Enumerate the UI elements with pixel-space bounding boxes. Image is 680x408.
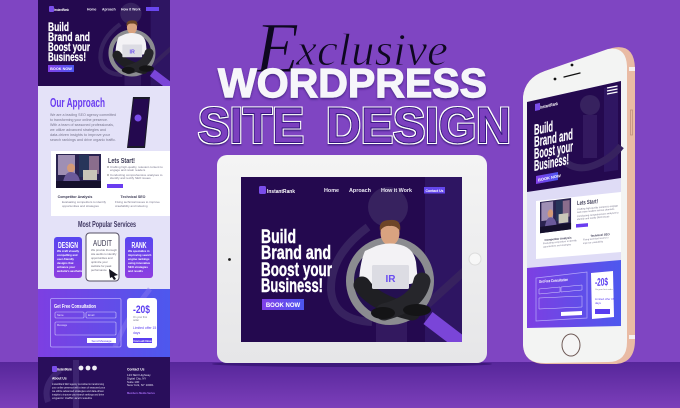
about us text: About Us bbox=[52, 376, 67, 380]
card: audit: opportunities and bbox=[91, 256, 113, 260]
panel: consultation call to action bbox=[38, 289, 170, 357]
illustration: man with laptop bbox=[331, 177, 470, 350]
price card: Consult Now bbox=[133, 339, 152, 343]
logo: InstantRank bbox=[54, 8, 69, 12]
panel: website page mockup bbox=[38, 0, 175, 408]
phone card text: Lets Start! bbox=[577, 199, 598, 207]
card: audit: AUDIT bbox=[93, 239, 112, 248]
card: rank: RANK bbox=[132, 241, 147, 250]
text block: approach paragraph: search rankings and drive organic traffic. bbox=[50, 137, 116, 142]
hero heading: Build bbox=[48, 22, 69, 34]
icon: phone mockup bbox=[127, 97, 150, 148]
contact details: Digital City, NY bbox=[127, 376, 146, 380]
tablet hero heading bbox=[261, 227, 332, 297]
tablet logo: InstantRank bbox=[267, 189, 296, 195]
phone card text: Conducting comprehensive analyses to bbox=[577, 211, 619, 218]
card: rank: SEO strategies bbox=[128, 265, 148, 269]
navigation bbox=[87, 7, 159, 12]
panel: footer bbox=[38, 357, 170, 408]
panel: phone screen bbox=[527, 81, 621, 328]
text block: approach paragraph: We are a leading SEO agency committed bbox=[50, 112, 116, 117]
card: design: designs that bbox=[57, 261, 74, 265]
contact details: Contact Us bbox=[127, 368, 145, 372]
hero illustration: man with laptop in magnifier bbox=[100, 0, 175, 90]
heading: lets start: Lets Start! bbox=[108, 156, 135, 165]
price card: Limited offer 15 bbox=[133, 326, 156, 330]
feature descriptions: opportunities and strategies bbox=[62, 204, 99, 208]
tablet navigation: Contact Us bbox=[426, 189, 444, 193]
title: site design: SITE bbox=[198, 98, 304, 154]
price card bbox=[127, 298, 157, 348]
contact details: 123 SEO Highway bbox=[127, 373, 151, 377]
card: rank: using innovative bbox=[128, 261, 151, 265]
text block: approach paragraph: data-driven insights to improve your bbox=[50, 132, 111, 137]
bullet list: engage and retain readers bbox=[110, 168, 146, 172]
card: audit: site audits to identify bbox=[91, 252, 117, 256]
bullet list: Crafting high-quality, relevant content to bbox=[110, 165, 163, 169]
contact details: Suite 100 bbox=[127, 380, 140, 384]
phone card text: opportunities and strategies bbox=[543, 243, 572, 249]
card: design: user-friendly bbox=[57, 257, 74, 261]
bullet list: identify and rectify SEO issues bbox=[110, 176, 151, 180]
tablet home button bbox=[469, 253, 481, 265]
bullet list: Conducting comprehensive analyses to bbox=[110, 173, 163, 177]
navigation: Aproach bbox=[102, 8, 116, 12]
subheading: competitor analysis: Competitor Analysis bbox=[58, 195, 92, 199]
bullet list bbox=[107, 165, 163, 180]
icon: cursor bbox=[109, 269, 118, 280]
card: audit bbox=[86, 233, 119, 281]
tablet logo bbox=[259, 186, 296, 195]
heading: most popular services: Most Popular Services bbox=[78, 220, 136, 229]
navigation: Home bbox=[87, 8, 97, 12]
title: site design bbox=[198, 98, 511, 154]
text block: approach paragraph: With a team of seasoned professionals, bbox=[50, 122, 114, 127]
price card: order bbox=[133, 318, 139, 322]
card: rank: engine rankings bbox=[128, 257, 150, 261]
phone card text: Fixing technical issues to bbox=[583, 236, 609, 242]
form outline: Email bbox=[88, 314, 95, 317]
card: audit: performance bbox=[91, 268, 107, 272]
tablet hero heading: Business! bbox=[261, 276, 323, 297]
title: wordpress: WORDPRESS bbox=[218, 60, 487, 106]
card: design: enhance your bbox=[57, 265, 76, 269]
tablet hero heading: Build bbox=[261, 227, 296, 248]
phone camera and speaker bbox=[554, 64, 580, 80]
panel: hero bbox=[38, 0, 175, 90]
subheading: technical seo: Technical SEO bbox=[121, 195, 146, 199]
card: audit: website for peak bbox=[91, 264, 112, 268]
title: site design: DESIGN bbox=[326, 98, 511, 154]
phone hero heading: Business! bbox=[534, 151, 569, 175]
feature descriptions: Fixing technical issues to improve bbox=[115, 200, 160, 204]
card: design: website's aesthetic bbox=[56, 269, 83, 273]
feature descriptions: crawlability and indexing bbox=[115, 204, 148, 208]
phone card text: Evaluating competitors to identify bbox=[543, 239, 577, 245]
price card: -20$ bbox=[133, 304, 150, 316]
hero heading: Brand and bbox=[48, 32, 90, 44]
card: design: DESIGN bbox=[58, 241, 78, 250]
form outline bbox=[50, 298, 121, 347]
tablet navigation: Home bbox=[324, 188, 340, 194]
panel: tablet screen bbox=[241, 177, 470, 350]
card: audit: optimize your bbox=[91, 260, 108, 264]
phone card text: and retain readers across channels bbox=[577, 208, 615, 214]
card: design: compelling and bbox=[57, 253, 78, 257]
phone price card: Limited offer 15 bbox=[595, 297, 615, 301]
title: exclusive bbox=[254, 8, 448, 88]
book now button: BOOK NOW bbox=[50, 67, 72, 71]
tablet book now button: BOOK NOW bbox=[266, 303, 300, 309]
phone hero heading: Brand and bbox=[534, 126, 573, 151]
phone hero: Boost your bbox=[534, 138, 573, 163]
text block: approach paragraph: to transforming your online presence. bbox=[50, 117, 108, 122]
feature descriptions: Evaluating competitors to identify bbox=[62, 200, 107, 204]
tablet navigation bbox=[324, 187, 445, 194]
card: audit: We provide thorough bbox=[91, 248, 117, 252]
phone price card bbox=[591, 271, 615, 319]
panel: footer: InstantRank bbox=[57, 368, 72, 372]
hero heading: Business! bbox=[48, 52, 86, 64]
tablet navigation: How it Work bbox=[381, 188, 413, 194]
social icons bbox=[79, 366, 97, 370]
card: design bbox=[54, 237, 83, 278]
about us text: InstantRank SEO agency committed to transforming bbox=[52, 382, 104, 386]
phone mockup bbox=[523, 47, 635, 364]
form outline: Message bbox=[57, 324, 68, 327]
phone form: Get Free Consultation bbox=[539, 277, 568, 284]
phone price card: days bbox=[595, 301, 602, 305]
contact details bbox=[127, 368, 155, 395]
feature descriptions bbox=[62, 200, 160, 208]
phone consultation section bbox=[527, 260, 621, 328]
contact details: New York, NY 10001 bbox=[127, 383, 154, 387]
phone logo: InstantRank bbox=[540, 101, 558, 110]
card: rank bbox=[125, 237, 153, 278]
phone bands and side button bbox=[629, 67, 635, 339]
about us text: we utilize advanced strategies and data-driven bbox=[52, 389, 104, 393]
about us text: insights to improve your search rankings and drive bbox=[52, 392, 104, 396]
photo: person at desk bbox=[56, 154, 101, 188]
card: rank: and results bbox=[128, 269, 143, 273]
phone card text: identify and rectify SEO issues bbox=[577, 215, 610, 221]
hero heading bbox=[48, 22, 90, 64]
tablet camera bbox=[228, 258, 231, 261]
form outline: Name bbox=[57, 314, 64, 317]
floor band bbox=[0, 362, 680, 408]
phone card text bbox=[543, 197, 619, 249]
phone price card: -20$ bbox=[595, 276, 608, 289]
phone card text: Competitor Analysis bbox=[544, 236, 572, 242]
phone white card bbox=[536, 192, 621, 259]
tablet mockup bbox=[212, 155, 492, 367]
text block: approach paragraph bbox=[50, 112, 116, 142]
tablet hero heading: Brand and bbox=[261, 243, 331, 264]
text block: approach paragraph: we utilize advanced strategies and bbox=[50, 127, 106, 132]
price card: On your first bbox=[133, 315, 147, 319]
phone menu icon bbox=[607, 86, 618, 94]
tablet hero heading: Boost your bbox=[261, 260, 332, 281]
phone price card: On your first order bbox=[595, 288, 613, 291]
phone book now button: BOOK NOW bbox=[538, 173, 561, 182]
phone photo bbox=[540, 198, 571, 233]
card: design: We craft visually bbox=[57, 249, 79, 253]
tablet navigation: Aproach bbox=[349, 188, 371, 194]
tablet book now button bbox=[262, 299, 304, 310]
about us text: your online presence with a team of seasoned pros bbox=[52, 386, 105, 390]
button: read more bbox=[107, 184, 123, 188]
phone card text: Crafting high-quality content to engage bbox=[577, 204, 619, 211]
card: rank: improving search bbox=[128, 253, 152, 257]
phone hero heading bbox=[534, 114, 573, 175]
title: exclusive: xclusive bbox=[295, 24, 448, 75]
price card: days bbox=[133, 331, 140, 335]
about us text: organic traffic and results bbox=[52, 396, 93, 400]
hero heading: Boost your bbox=[48, 42, 90, 54]
phone hero heading: Build bbox=[534, 118, 553, 139]
navigation: How it Work bbox=[121, 8, 141, 12]
heading: our approach: Our Approach bbox=[50, 95, 105, 110]
title: exclusive: E bbox=[254, 8, 299, 88]
contact details: Members Media Series bbox=[127, 391, 155, 395]
phone home button bbox=[562, 334, 580, 356]
phone card text: improve crawlability bbox=[583, 240, 604, 245]
about us text bbox=[52, 376, 105, 400]
phone hero bbox=[527, 81, 621, 192]
panel: lets start card bbox=[51, 151, 170, 216]
form outline: Get Free Consultation bbox=[54, 304, 96, 310]
phone hero background shapes bbox=[556, 85, 621, 172]
phone card text: Technical SEO bbox=[590, 232, 610, 238]
card: rank: We specialize in bbox=[128, 249, 150, 253]
form outline: Send Message bbox=[91, 339, 112, 343]
